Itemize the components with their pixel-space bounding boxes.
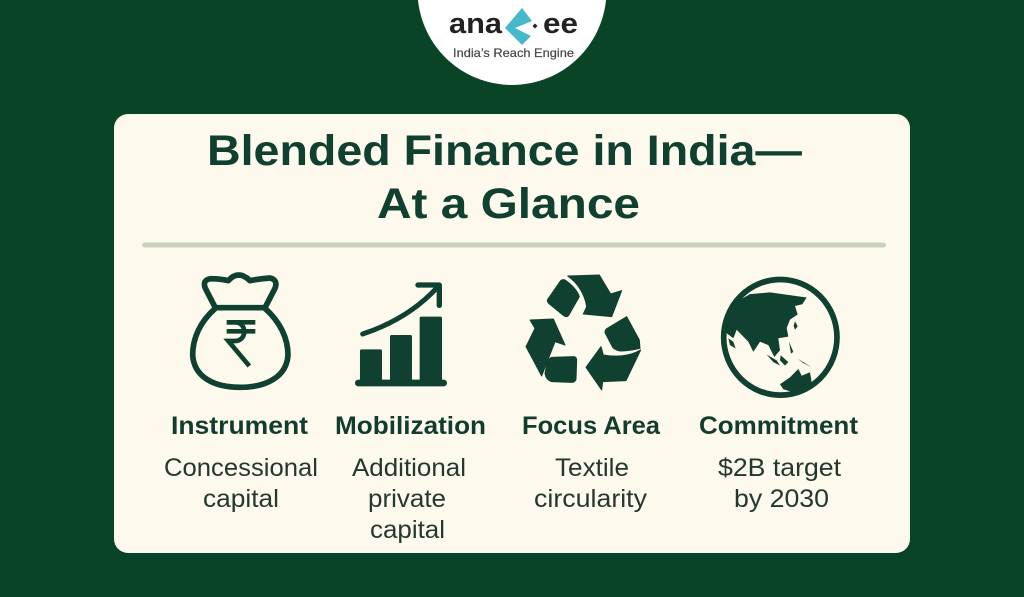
- title: At a Glance: [377, 180, 640, 228]
- text: focus area detail: Textile: [555, 454, 629, 482]
- heading: focus area: Focus Area: [522, 412, 661, 440]
- text: mobilization detail: Additional: [352, 454, 466, 482]
- column: commitment: [699, 279, 859, 513]
- heading: commitment: Commitment: [699, 412, 859, 440]
- text: mobilization detail: capital: [370, 516, 445, 544]
- logo wordmark right: ee: [543, 8, 578, 40]
- text: mobilization detail: [352, 454, 466, 544]
- text: instrument detail: capital: [203, 485, 279, 513]
- column: focus area: [522, 275, 661, 513]
- icon: money bag: [193, 275, 288, 387]
- logo dot: [532, 24, 538, 28]
- text: commitment detail: [718, 454, 841, 513]
- icon: recycle: [526, 275, 641, 390]
- panel: main card: [114, 114, 910, 553]
- title: [207, 127, 802, 228]
- text: instrument detail: Concessional: [164, 454, 318, 482]
- text: mobilization detail: private: [368, 485, 446, 513]
- logo tagline: India’s Reach Engine: [453, 46, 574, 60]
- text: focus area detail: [534, 454, 648, 513]
- text: instrument detail: [164, 454, 318, 513]
- title: Blended Finance in India—: [207, 127, 802, 175]
- icon: globe: [724, 279, 837, 395]
- logo wordmark left: ana: [449, 8, 503, 40]
- column: instrument: [164, 275, 318, 513]
- logo badge: [418, 0, 606, 85]
- icon: growth chart: [355, 285, 447, 386]
- logo icon: [505, 8, 532, 45]
- text: focus area detail: circularity: [534, 485, 648, 513]
- heading: mobilization: Mobilization: [335, 412, 486, 440]
- text: commitment detail: $2B target: [718, 454, 841, 482]
- column: mobilization: [335, 285, 486, 544]
- text: commitment detail: by 2030: [734, 485, 829, 513]
- heading: instrument: Instrument: [171, 412, 309, 440]
